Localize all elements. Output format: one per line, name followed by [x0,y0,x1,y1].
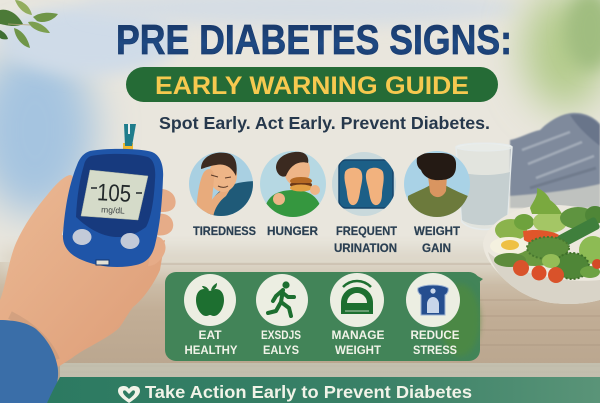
glucose meter: 105 [96,179,132,208]
screen [81,170,148,220]
hand holding glucose meter [0,175,176,403]
icon: heart [118,386,140,403]
sign labels: FREQUENT [336,226,397,238]
action labels: HEALTHY [184,345,238,357]
icon: runner [256,274,308,326]
action labels [184,330,460,357]
leaves top left [0,0,58,48]
action labels: EAT [198,330,222,342]
icon: stress [406,273,460,327]
subtitle pill: EARLY WARNING GUIDE [155,72,469,100]
glucose meter [63,149,163,267]
action labels: STRESS [413,345,457,357]
water glass [456,143,512,230]
icon: scale [330,273,384,327]
sleeve [0,320,58,403]
subtitle pill [126,67,498,102]
panel: prevention actions [165,272,483,361]
sign labels: TIREDNESS [193,226,256,238]
sign: weight gain [404,151,470,217]
action labels: EXSDJS [261,330,301,342]
tagline: Spot Early. Act Early. Prevent Diabetes. [159,113,490,133]
action labels: MANAGE [332,330,385,342]
test strip [123,124,136,152]
sign labels: URINATION [334,243,397,255]
action labels: EALYS [263,345,299,357]
sign labels: GAIN [422,243,451,255]
sign labels: HUNGER [267,226,319,238]
action labels: WEIGHT [335,345,381,357]
buttons [72,229,92,245]
bottom banner: Take Action Early to Prevent Diabetes [145,382,472,402]
sign labels [193,226,460,255]
action labels: REDUCE [410,330,460,342]
title: PRE DIABETES SIGNS: [116,16,512,63]
bottom banner [47,377,600,403]
running shoes [510,113,600,208]
icon: apple [184,274,236,326]
salad bowl [483,188,600,304]
sign: hunger [260,151,326,217]
glucose meter: mg/dL [101,204,125,216]
sign: tiredness [189,152,253,216]
sign labels: WEIGHT [414,226,460,238]
hand [0,175,165,367]
sign: frequent urination [332,152,396,216]
